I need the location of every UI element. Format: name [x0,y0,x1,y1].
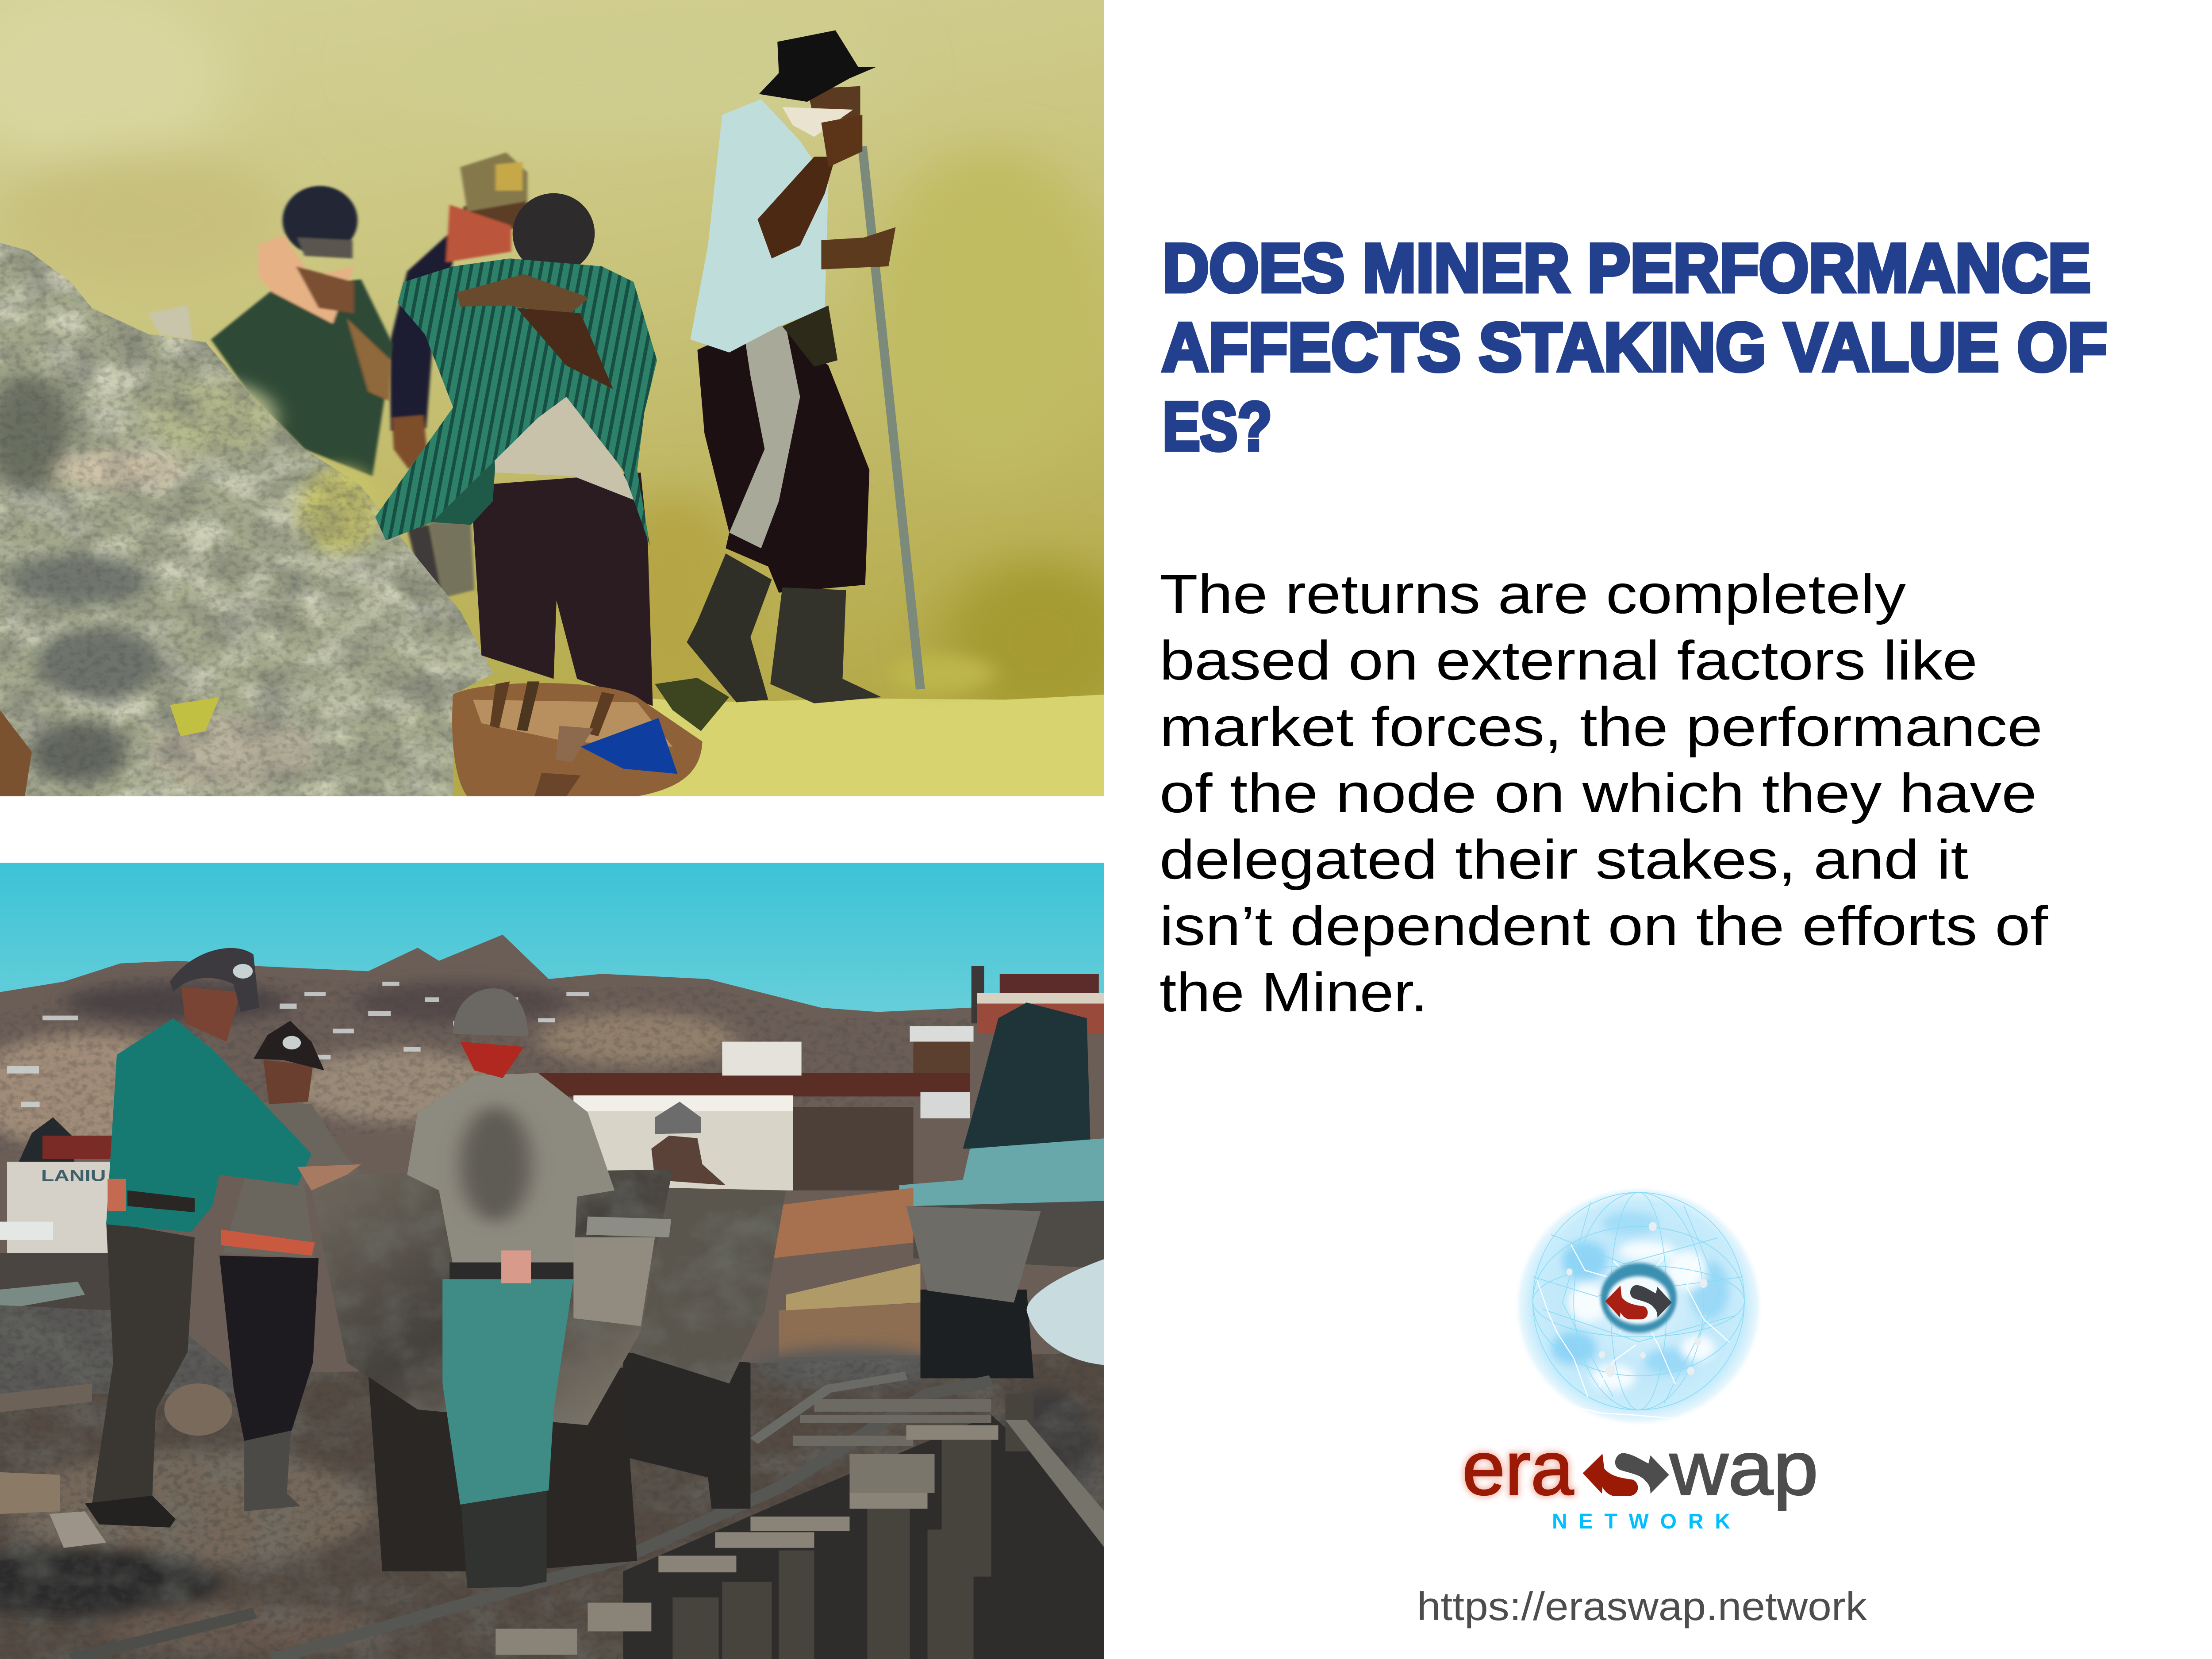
town buildings on the left: LANIU [41,1167,106,1184]
heading: DOES MINER PERFORMANCE [1163,230,2091,306]
logo: eraswap wordmark: wap [1669,1426,1818,1511]
logo: eraswap wordmark: era [1462,1426,1574,1511]
heading: ES? [1163,388,1272,465]
figure: second miner [219,1021,361,1511]
sulfur ground [488,655,1106,796]
logo: glowing network sphere [1514,1185,1763,1427]
far ore cart [906,1206,1106,1378]
figure: centre miner in striped coat [375,193,657,706]
website url: https://eraswap.network [1417,1585,1867,1629]
middle ore cart with distant miner [623,1102,786,1509]
figure: left miner in teal shirt [85,948,361,1528]
body text: isn’t dependent on the efforts of [1160,895,2048,957]
rock pile [0,243,493,796]
body text: market forces, the performance [1160,696,2043,758]
heading: AFFECTS STAKING VALUE OF [1162,309,2107,385]
figure: back miner with cap [389,153,527,598]
logo: swap arrows [1583,1453,1669,1496]
logo: network label: NETWORK [1552,1510,1730,1533]
small basket at left edge [0,710,32,796]
logo: eraswap wordmark: era [1462,1426,1574,1511]
body text: The returns are completely [1160,564,1906,625]
body text: the Miner. [1160,962,1428,1023]
body text: based on external factors like [1160,630,1978,691]
figure: left miner in green shirt [149,186,393,476]
main ore cart [308,1170,672,1571]
figure: centre miner seen from behind [407,988,614,1588]
background hills [0,935,1106,1415]
photo: sulfur miners in yellow smoke [0,0,1140,796]
logo: eraswap wordmark [1462,1426,1818,1511]
rails and sleepers [71,1376,1106,1659]
body text: delegated their stakes, and it [1160,829,1968,891]
body text: of the node on which they have [1160,763,2037,824]
wicker basket with blue cloth [452,681,703,796]
figure: right miner with bucket hat [687,30,921,703]
town buildings on the left [0,1118,120,1310]
logo: centre swap icon [1605,1285,1672,1319]
heading [1162,230,2107,465]
body text [1160,564,2048,1023]
town buildings on the right [538,966,1106,1357]
ground and gravel [0,1305,1126,1659]
photo: miners with ore carts [0,863,1126,1659]
